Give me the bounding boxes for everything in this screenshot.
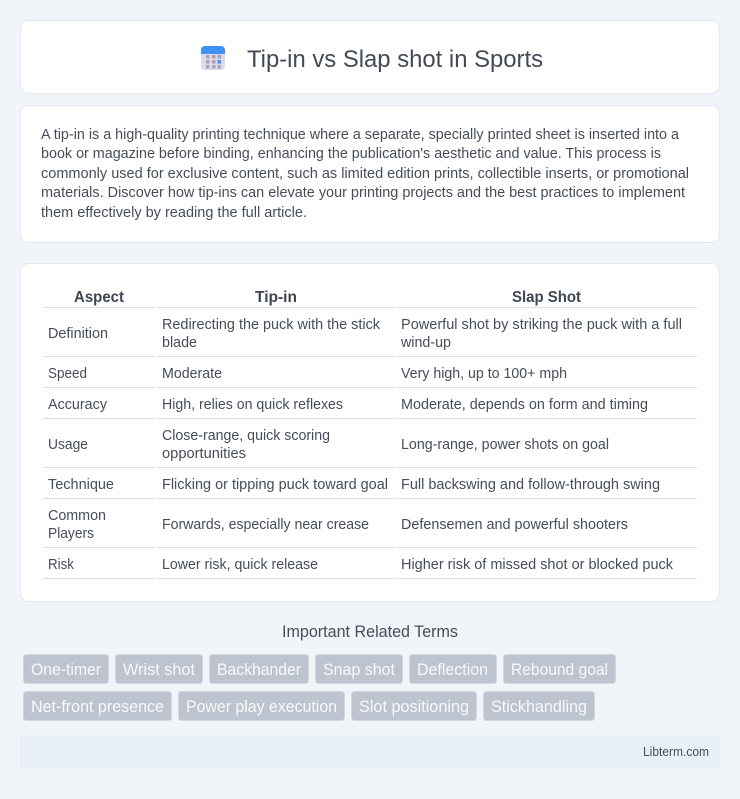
- row: Common Players: Players: [48, 526, 94, 542]
- row: Definition: Definition: [48, 326, 108, 342]
- row: Common Players: Forwards, especially near crease: [162, 517, 369, 533]
- tag: Backhander: [210, 654, 308, 684]
- tag: Stickhandling: [484, 692, 594, 720]
- tag: Power play execution: Power play execution: [186, 698, 337, 716]
- row: Speed: Moderate: [162, 366, 222, 382]
- text block: description: A tip-in is a high-quality printing technique where a separate, specially printed sheet is inserted into a: [41, 127, 680, 143]
- row: Common Players: Defensemen and powerful shooters: [401, 517, 628, 533]
- row: Usage: opportunities: [162, 446, 246, 462]
- row: Technique: Technique: [48, 477, 114, 493]
- tag: Wrist shot: [116, 654, 202, 684]
- tag: Net-front presence: Net-front presence: [31, 698, 164, 716]
- tag: Rebound goal: Rebound goal: [511, 661, 608, 679]
- row: Technique: [43, 477, 697, 499]
- row: Usage: [43, 428, 697, 468]
- tag: One-timer: [24, 654, 108, 684]
- tag: Snap shot: Snap shot: [323, 661, 395, 679]
- panel: introduction text: [20, 106, 720, 242]
- row: Risk: [43, 557, 697, 579]
- row: Accuracy: Accuracy: [48, 397, 108, 413]
- row: Technique: Full backswing and follow-through swing: [401, 477, 660, 493]
- table header: [43, 289, 697, 308]
- tag: Stickhandling: Stickhandling: [491, 698, 587, 716]
- panel: related term tags: [24, 654, 616, 720]
- heading: related terms: Important Related Terms: [282, 623, 458, 641]
- row: Speed: [43, 366, 697, 388]
- row: Accuracy: High, relies on quick reflexes: [162, 397, 343, 413]
- table header: Tip-in: [255, 289, 297, 306]
- tag: Backhander: Backhander: [217, 661, 301, 679]
- row: Definition: [43, 317, 697, 357]
- tag: Net-front presence: [24, 692, 172, 720]
- icon: calendar: [201, 46, 225, 70]
- row: Accuracy: Moderate, depends on form and timing: [401, 397, 648, 413]
- row: Usage: Long-range, power shots on goal: [401, 437, 609, 453]
- row: Common Players: [43, 508, 697, 548]
- text block: description: commonly used for exclusive content, such as limited edition prints, collectible inserts, or promotional: [41, 166, 689, 182]
- row: Speed: Speed: [48, 366, 87, 382]
- tag: Power play execution: [178, 692, 344, 720]
- text block: description: them effectively by reading the full article.: [41, 205, 307, 221]
- text block: description: materials. Discover how tip-ins can elevate your printing projects and the best practices to implement: [41, 185, 685, 201]
- row: Definition: wind-up: [400, 335, 451, 351]
- row: Definition: blade: [162, 335, 197, 351]
- tag: Deflection: Deflection: [417, 661, 488, 679]
- text block: description: book or magazine before binding, enhancing the publication's aesthetic and value. This process is: [41, 146, 661, 162]
- tag: Snap shot: [316, 654, 402, 684]
- panel: title card: [20, 20, 720, 94]
- tag: Slot positioning: Slot positioning: [359, 698, 469, 716]
- row: Usage: Close-range, quick scoring: [162, 428, 330, 444]
- row: Definition: Redirecting the puck with the stick: [162, 317, 381, 333]
- tag: One-timer: One-timer: [31, 661, 101, 679]
- tag: Deflection: [410, 654, 496, 684]
- tag: Wrist shot: Wrist shot: [123, 661, 195, 679]
- row: Technique: Flicking or tipping puck toward goal: [162, 477, 388, 493]
- row: Accuracy: [43, 397, 697, 419]
- row: Risk: Risk: [48, 557, 75, 573]
- row: Risk: Lower risk, quick release: [162, 557, 318, 573]
- table header: Slap Shot: [512, 289, 581, 306]
- tag: Rebound goal: [504, 654, 616, 684]
- title: Tip-in vs Slap shot in Sports: [247, 46, 543, 73]
- row: Speed: Very high, up to 100+ mph: [401, 366, 567, 382]
- row: Definition: Powerful shot by striking the puck with a full: [401, 317, 682, 333]
- footer: [20, 735, 720, 769]
- panel: comparison table: [20, 264, 720, 602]
- tag: Slot positioning: [352, 692, 476, 720]
- row: Risk: Higher risk of missed shot or blocked puck: [401, 557, 674, 573]
- table header: Aspect: [74, 289, 124, 306]
- row: Common Players: Common: [48, 508, 106, 524]
- text block: description: [41, 127, 689, 221]
- footer credit: Libterm.com: [643, 744, 709, 759]
- row: Usage: Usage: [48, 437, 88, 453]
